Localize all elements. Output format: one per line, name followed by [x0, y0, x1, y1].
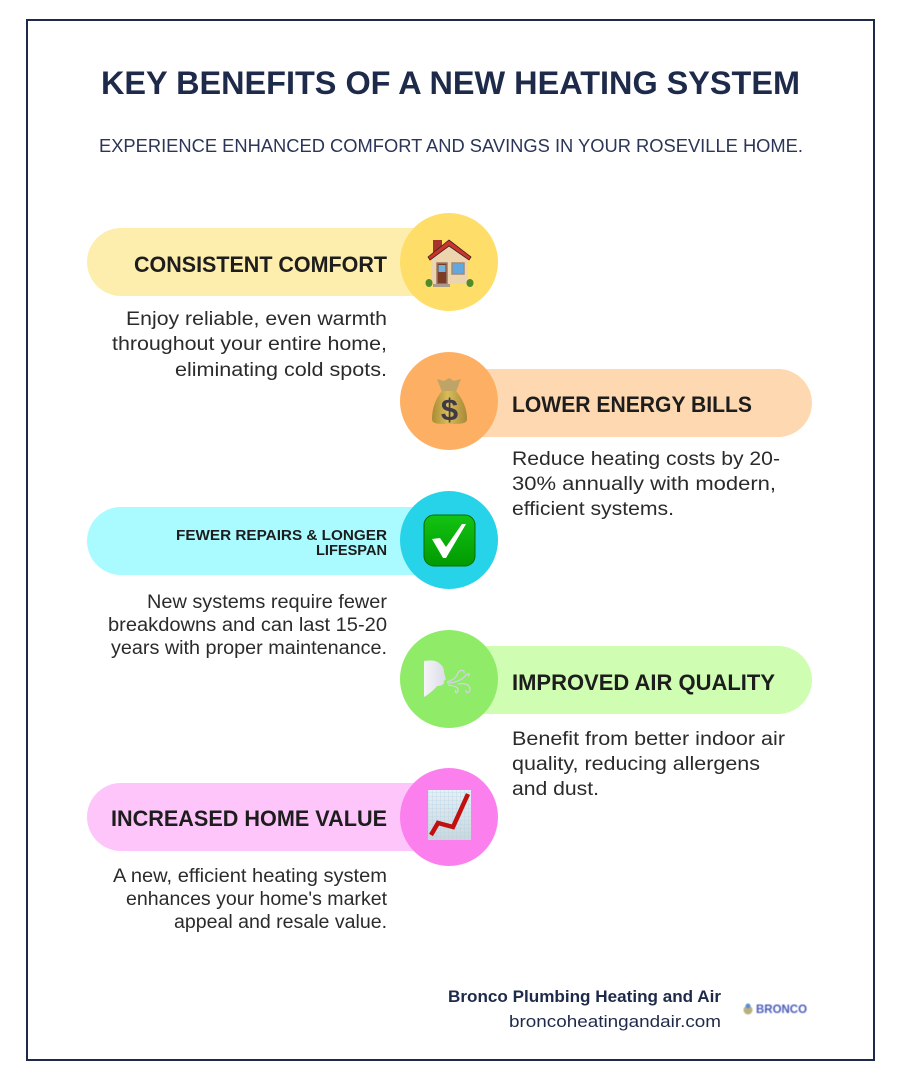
heading: fewer repairs — [176, 528, 388, 559]
circle: improved air quality — [400, 630, 498, 728]
icon: money bag: $ — [441, 392, 458, 427]
description: fewer repairs — [108, 592, 388, 659]
heading: fewer repairs: LIFESPAN — [316, 543, 387, 559]
pill: improved air quality — [449, 646, 812, 714]
footer — [448, 988, 807, 1031]
panel: fewer repairs — [87, 491, 498, 659]
pill: lower energy bills — [449, 369, 812, 437]
description: lower energy bills: Reduce heating costs by 20- — [512, 449, 780, 470]
pill: consistent comfort — [87, 228, 449, 296]
description: increased home value: enhances your home's market — [126, 889, 388, 910]
subtitle: EXPERIENCE ENHANCED COMFORT AND SAVINGS IN YOUR ROSEVILLE HOME. — [99, 136, 803, 156]
description: improved air quality: Benefit from better indoor air — [512, 729, 786, 750]
pill: increased home value — [87, 783, 449, 851]
icon: wind face — [424, 660, 470, 697]
description: consistent comfort: eliminating cold spots. — [175, 360, 387, 381]
description: lower energy bills: efficient systems. — [512, 499, 674, 520]
circle: consistent comfort — [400, 213, 498, 311]
description: lower energy bills: 30% annually with modern, — [512, 474, 776, 495]
description: consistent comfort: throughout your entire home, — [112, 334, 387, 355]
description: improved air quality — [512, 729, 786, 800]
description: increased home value — [113, 866, 388, 933]
circle: fewer repairs — [400, 491, 498, 589]
description: fewer repairs: New systems require fewer — [147, 592, 388, 613]
description: increased home value: appeal and resale value. — [174, 912, 387, 933]
panel: increased home value — [87, 768, 498, 933]
icon: check mark — [424, 515, 475, 566]
description: increased home value: A new, efficient heating system — [113, 866, 387, 887]
heading: lower energy bills: LOWER ENERGY BILLS — [512, 392, 752, 417]
icon: chart — [428, 790, 471, 840]
description: fewer repairs: years with proper maintenance. — [111, 638, 387, 659]
pill: fewer repairs — [87, 507, 449, 575]
logo: BRONCO — [756, 1002, 807, 1016]
description: lower energy bills — [512, 449, 780, 520]
heading: consistent comfort: CONSISTENT COMFORT — [134, 252, 388, 277]
title: KEY BENEFITS OF A NEW HEATING SYSTEM — [101, 65, 800, 101]
circle: increased home value — [400, 768, 498, 866]
description: improved air quality: and dust. — [512, 779, 599, 800]
description: consistent comfort: Enjoy reliable, even warmth — [126, 309, 387, 330]
company name: Bronco Plumbing Heating and Air — [448, 988, 722, 1006]
panel: lower energy bills — [400, 352, 812, 520]
panel: consistent comfort — [87, 213, 498, 381]
heading: increased home value: INCREASED HOME VALUE — [111, 806, 387, 831]
description: fewer repairs: breakdowns and can last 15-20 — [108, 615, 387, 636]
heading: improved air quality: IMPROVED AIR QUALITY — [512, 670, 775, 695]
description: consistent comfort — [112, 309, 387, 381]
icon: house — [426, 240, 474, 287]
description: improved air quality: quality, reducing allergens — [512, 754, 760, 775]
circle: lower energy bills — [400, 352, 498, 450]
icon: money bag — [432, 378, 467, 427]
heading: fewer repairs: FEWER REPAIRS & LONGER — [176, 528, 388, 544]
panel: improved air quality — [400, 630, 812, 800]
website: broncoheatingandair.com — [509, 1012, 721, 1031]
